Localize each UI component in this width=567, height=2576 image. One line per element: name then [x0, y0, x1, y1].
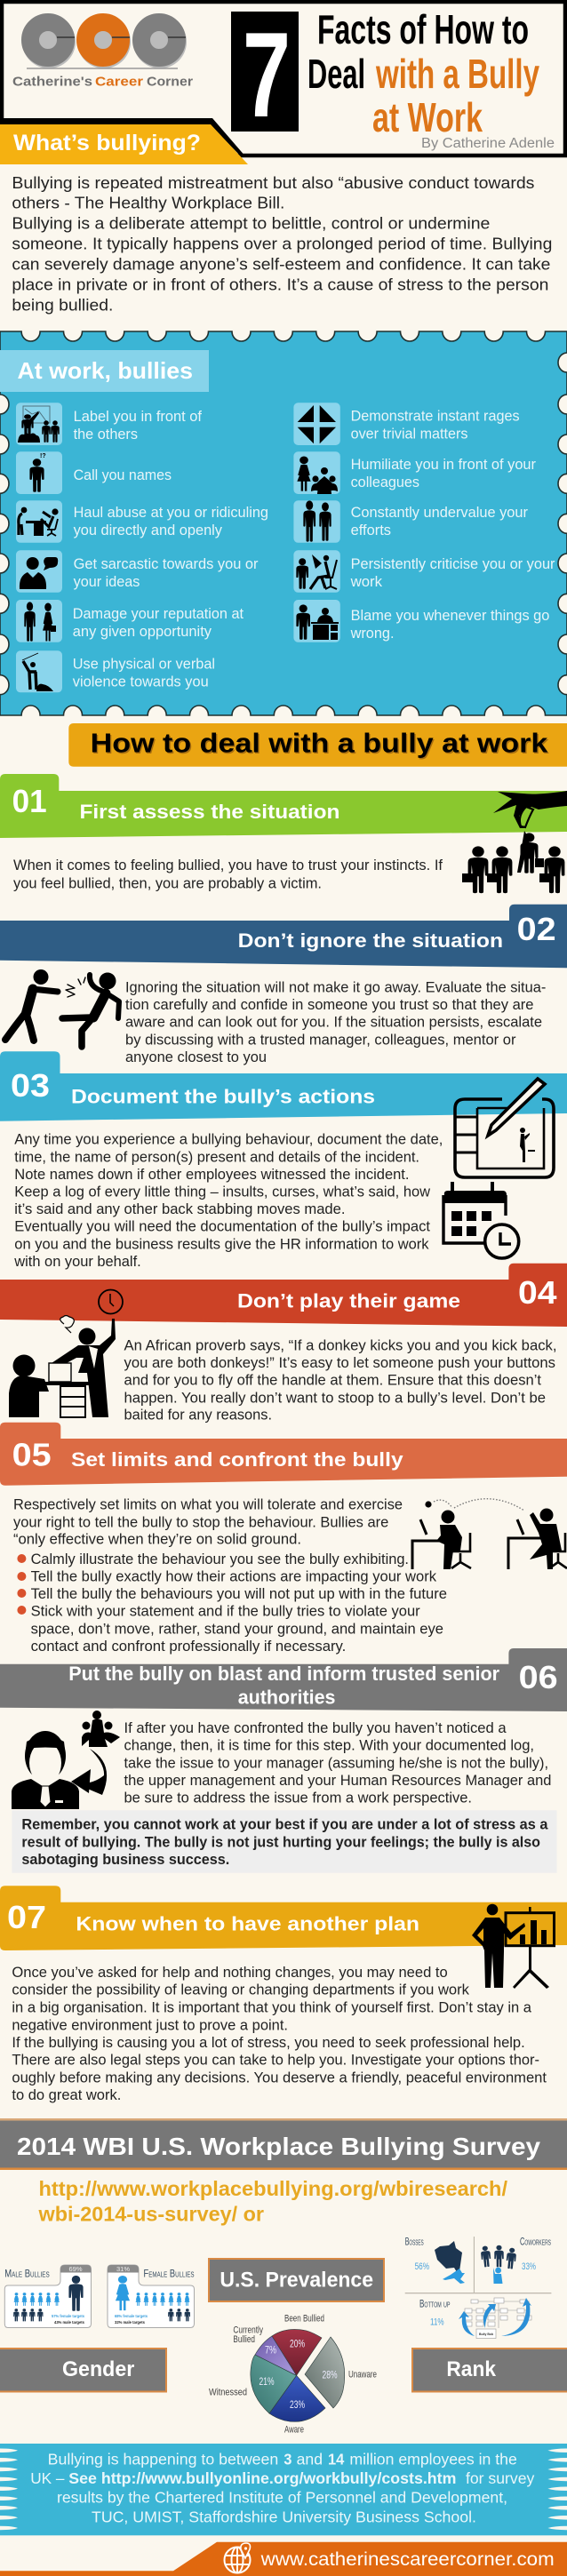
- list: right column behaviours: Persistently criticise you or your: [351, 556, 555, 572]
- body 03: Eventually you will need the documentation of the bully’s impact: [14, 1219, 430, 1235]
- slice values: 20%: [290, 2340, 305, 2350]
- step 07: Know when to have another plan: [0, 1886, 567, 2103]
- card: female bullies: 68% female targets: [115, 2314, 148, 2318]
- body 05: Respectively set limits on what you will tolerate and exercise: [13, 1496, 403, 1512]
- list: right column behaviours: efforts: [351, 522, 391, 538]
- survey heading band: [0, 2118, 567, 2170]
- body 01: you feel bullied, then, you are probably a victim.: [13, 875, 322, 891]
- card: female bullies: 32% male targets: [115, 2320, 146, 2325]
- panel heading: At work, bullies: [0, 350, 209, 392]
- card: female bullies: Female Bullies: [144, 2268, 194, 2280]
- logo: Catherine's Career Corner: [12, 15, 193, 89]
- number 01: 01: [12, 783, 47, 819]
- band 01: [0, 774, 567, 838]
- body 03: Note names down if other employees witnessed the incident.: [14, 1167, 409, 1183]
- body 03: Any time you experience a bullying behaviour, document the date,: [14, 1132, 443, 1148]
- statistics text: See http://www.bullyonline.org/workbully/costs.htm: [68, 2469, 456, 2487]
- label: Gender: [0, 2349, 166, 2392]
- body 06: the upper management and your Human Resources Manager and: [124, 1773, 551, 1789]
- body 07: in a big organisation. It is important that you think of yourself first. Don’t stay in a: [12, 2000, 532, 2016]
- body 04: and for you to fly off the handle at them. Ensure that this doesn’t: [124, 1373, 541, 1389]
- body 01: When it comes to feeling bullied, you have to trust your instincts. If: [13, 857, 443, 873]
- icon: man with question marks: !?: [40, 453, 46, 459]
- list: right column behaviours: [350, 408, 555, 642]
- rank: bosses: [405, 2236, 465, 2284]
- icon: woman and group: [297, 456, 338, 494]
- body 07: to do great work.: [12, 2087, 121, 2103]
- heading 03: Document the bully’s actions: [71, 1086, 375, 1108]
- body 06: [124, 1720, 551, 1806]
- body 07: If the bullying is causing you a lot of stress, you need to seek professional help.: [12, 2035, 525, 2051]
- body 07: Once you’ve asked for help and nothing changes, you may need to: [12, 1965, 448, 1981]
- logo: Catherine's Career Corner: Catherine's: [12, 75, 92, 89]
- slice values: 21%: [260, 2377, 274, 2388]
- list: right column behaviours: Humiliate you in front of your: [351, 457, 537, 473]
- icon tiles: [16, 403, 340, 692]
- heading: How to deal with a bully at work: How to deal with a bully at work: [91, 729, 547, 759]
- panel heading: At work, bullies: At work, bullies: [18, 357, 193, 384]
- decorative notches: [0, 2449, 567, 2530]
- title: [307, 6, 539, 140]
- list: right column behaviours: wrong.: [350, 626, 395, 642]
- statistics text: 14: [328, 2450, 345, 2468]
- card: female bullies: 31%: [116, 2265, 130, 2273]
- callout: remember: Remember, you cannot work at your best if you are under a lot of stress as a: [21, 1816, 548, 1832]
- logo: Catherine's Career Corner: Corner: [147, 75, 193, 89]
- body 02: Ignoring the situation will not make it go away. Evaluate the situa-: [125, 980, 546, 996]
- body 03: [13, 1132, 443, 1270]
- header panel: [2, 2, 565, 156]
- bullet list: Stick with your statement and if the bully tries to violate your: [31, 1604, 420, 1620]
- body 06: be sure to address the issue from a work perspective.: [124, 1790, 472, 1806]
- body 07: consider the possibility of leaving or changing departments if you work: [12, 1982, 470, 1998]
- icon: boss with feet on desk: [19, 507, 59, 536]
- rank: bosses: Bosses: [405, 2236, 424, 2248]
- gender chart: [4, 2265, 194, 2328]
- bullet list: space, don’t move, rather, stand your ground, and maintain eye: [31, 1621, 443, 1637]
- slice labels: Been Bullied: [284, 2314, 324, 2325]
- body 07: There are also legal steps you can take to help you. Investigate your options thor-: [12, 2053, 539, 2069]
- step 02: Don't ignore the situation: [0, 905, 567, 1065]
- step 05: Set limits and confront the bully: [0, 1423, 567, 1655]
- slices: [251, 2329, 345, 2421]
- list: left column behaviours: Damage your reputation at: [73, 606, 244, 622]
- list: left column behaviours: any given opportunity: [73, 624, 212, 640]
- statistics text: results by the Chartered Institute of Personnel and Development,: [57, 2489, 507, 2507]
- bullet list: Calmly illustrate the behaviour you see the bully exhibiting.: [31, 1551, 409, 1567]
- title: at Work: [372, 94, 483, 140]
- heading 02: Don’t ignore the situation: [238, 929, 503, 952]
- statistics text: [30, 2450, 535, 2525]
- list: right column behaviours: colleagues: [351, 475, 419, 490]
- title: Deal: [307, 51, 365, 97]
- list: right column behaviours: Demonstrate instant rages: [351, 408, 520, 424]
- rank chart: [405, 2236, 551, 2339]
- heading 06: authorities: [238, 1686, 336, 1708]
- icon: manager bust, group and arrow: [12, 1711, 120, 1809]
- body 04: [124, 1337, 556, 1423]
- survey link: wbi-2014-us-survey/ or: [38, 2202, 264, 2225]
- card: male bullies: [4, 2265, 91, 2328]
- text block: definition of bullying: can severely damage anyone’s self-esteem and confidence. It can take: [12, 256, 550, 274]
- body 03: time, the name of person(s) present and details of the incident.: [14, 1149, 419, 1165]
- slice labels: Currently: [233, 2325, 263, 2336]
- list: left column behaviours: you directly and openly: [74, 522, 223, 538]
- bullet list: [17, 1551, 447, 1655]
- slice values: 23%: [290, 2400, 305, 2411]
- statistics text: 3: [284, 2450, 292, 2468]
- body 07: negative environment just to prove a point.: [12, 2017, 288, 2033]
- card: male bullies: 43% male targets: [54, 2320, 85, 2325]
- step 04: Don't play their game: [0, 1264, 567, 1423]
- rank: coworkers: 33%: [522, 2261, 536, 2272]
- panel: at work, bullies (stamp): [0, 331, 567, 715]
- body 03: with on your behalf.: [13, 1254, 141, 1270]
- body 07: [12, 1965, 547, 2103]
- card: male bullies: 57% female targets: [52, 2314, 85, 2318]
- slice labels: [209, 2314, 377, 2435]
- icon: man with question marks: [29, 453, 46, 492]
- slice values: [260, 2340, 338, 2411]
- slice labels: Witnessed: [209, 2388, 247, 2398]
- text block: definition of bullying: being bullied.: [12, 296, 113, 314]
- banner: What's bullying?: What’s bullying?: [13, 132, 201, 156]
- callout: remember: sabotaging business success.: [21, 1852, 229, 1868]
- number 04: 04: [518, 1274, 556, 1311]
- list: right column behaviours: over trivial matters: [351, 426, 467, 442]
- callout: remember: [12, 1810, 556, 1873]
- heading: How to deal with a bully at work: How to deal with a bully at work: [92, 730, 549, 760]
- band 07: [0, 1886, 567, 1950]
- statistics text: Bullying is happening to between: [48, 2450, 278, 2468]
- statistics text: and: [297, 2450, 323, 2468]
- text block: definition of bullying: Bullying is repeated mistreatment but also “abusive conduct towards: [12, 174, 534, 192]
- text block: definition of bullying: place in private or in front of others. It’s a cause of stress to the person: [12, 276, 548, 294]
- number 03: 03: [11, 1067, 50, 1104]
- icon: man and seated woman reading: [296, 554, 337, 589]
- rank: bottom up: Bottom up: [419, 2298, 450, 2310]
- list: right column behaviours: work: [350, 574, 383, 590]
- card: male bullies: Male Bullies: [4, 2268, 50, 2280]
- rank: coworkers: [480, 2236, 551, 2284]
- survey link: http://www.workplacebullying.org/wbiresearch/: [39, 2177, 507, 2200]
- footer: [0, 2542, 567, 2576]
- rank: bottom up: [419, 2298, 531, 2339]
- list: left column behaviours: violence towards you: [73, 674, 209, 690]
- icon: angry man at desk with clock: [9, 1290, 123, 1417]
- rank: bottom up: Bully Bob: [479, 2332, 493, 2336]
- body 02: anyone closest to you: [125, 1049, 267, 1065]
- list: left column behaviours: the others: [74, 427, 138, 443]
- list: left column behaviours: Haul abuse at you or ridiculing: [74, 505, 268, 521]
- number 07: 07: [7, 1899, 46, 1935]
- bullet list: Tell the bully exactly how their actions are impacting your work: [31, 1568, 437, 1584]
- body 06: take the issue to your manager (assuming he/she is not the bully),: [124, 1755, 548, 1771]
- survey link: [38, 2177, 507, 2225]
- band 03: [0, 1051, 567, 1121]
- label: Rank: Rank: [446, 2357, 497, 2381]
- text block: definition of bullying: Bullying is a deliberate attempt to belittle, control or undermine: [12, 215, 490, 233]
- body 04: you are both donkeys!” It’s easy to let someone push your buttons: [124, 1355, 555, 1371]
- list: left column behaviours: Use physical or verbal: [73, 657, 215, 673]
- bullet list: Tell the bully the behaviours you will not put up with in the future: [31, 1586, 447, 1602]
- body 05: your right to tell the bully to stop the behaviour. Bullies are: [13, 1514, 388, 1530]
- body 06: change, then, it is time for this step. With your documented log,: [124, 1738, 534, 1754]
- band 02: [0, 905, 567, 968]
- slice values: 28%: [322, 2371, 338, 2381]
- slice labels: Aware: [284, 2424, 304, 2435]
- byline: By Catherine Adenle: [421, 136, 555, 151]
- icon: speaker bust with speech bubble: [20, 557, 58, 589]
- body 03: it’s said and any other back stabbing moves made.: [14, 1201, 346, 1217]
- icon: figure striking a kneeling person: [22, 653, 53, 691]
- card: male bullies: 69%: [68, 2265, 83, 2273]
- number 02: 02: [517, 911, 556, 947]
- body 02: aware and can look out for you. If the situation persists, escalate: [125, 1015, 542, 1031]
- body 04: An African proverb says, “If a donkey kicks you and you kick back,: [124, 1337, 556, 1353]
- icon: calendar with clock: [443, 1182, 519, 1258]
- list: right column behaviours: Blame you whenever things go: [351, 608, 549, 624]
- label: U.S. Prevalence: [209, 2259, 384, 2301]
- banner: What's bullying?: [0, 118, 248, 164]
- statistics text: TUC, UMIST, Staffordshire University Business School.: [92, 2508, 476, 2525]
- body 02: [125, 980, 546, 1065]
- band 04: [0, 1264, 567, 1327]
- statistics text: million employees in the: [349, 2450, 517, 2468]
- list: left column behaviours: Get sarcastic towards you or: [74, 556, 259, 572]
- statistics text: for survey: [466, 2469, 535, 2487]
- big number 7: 7: [243, 7, 291, 142]
- label: U.S. Prevalence: U.S. Prevalence: [220, 2268, 373, 2292]
- heading 06: Put the bully on blast and inform trusted senior: [68, 1663, 499, 1685]
- icon: two businessmen: [303, 500, 331, 542]
- text block: definition of bullying: others - The Healthy Workplace Bill.: [12, 195, 284, 212]
- body 01: [13, 857, 443, 891]
- icon: presenter with bar chart board: [472, 1904, 555, 1989]
- list: left column behaviours: your ideas: [74, 574, 140, 590]
- statistics text: UK –: [30, 2469, 65, 2487]
- list: left column behaviours: [73, 409, 268, 690]
- icon: globe with pin: [224, 2543, 251, 2573]
- step 01: First assess the situation: [0, 774, 567, 893]
- body 02: tion carefully and confide in someone you trust so that they are: [125, 997, 533, 1013]
- body 05: “only effective when they’re on solid ground.: [13, 1532, 301, 1548]
- icon: man at desk: [296, 604, 339, 640]
- rank: bottom up: 11%: [430, 2317, 444, 2328]
- logo: Catherine's Career Corner: Career: [95, 75, 143, 89]
- list: right column behaviours: Constantly undervalue your: [351, 505, 529, 521]
- pie chart: U.S. prevalence: [209, 2314, 377, 2435]
- body 05: [13, 1496, 403, 1548]
- slice labels: Bullied: [233, 2334, 255, 2345]
- label: Rank: [412, 2349, 567, 2392]
- icon: man and woman talking: [24, 602, 56, 642]
- body 03: Keep a log of every little thing – insults, curses, what’s said, how: [14, 1184, 430, 1200]
- icon: giant hand lifting a worker: [462, 791, 567, 893]
- number 05: 05: [12, 1436, 52, 1472]
- number 06: 06: [519, 1659, 558, 1695]
- icon: tablet with pencil: [455, 1079, 554, 1177]
- list: left column behaviours: Label you in front of: [74, 409, 203, 425]
- body 04: baited for any reasons.: [124, 1407, 272, 1423]
- survey heading band: 2014 WBI U.S. Workplace Bullying Survey: [17, 2133, 540, 2160]
- band 06: [0, 1648, 567, 1711]
- list: left column behaviours: Call you names: [74, 467, 172, 483]
- body 04: happen. You really don’t want to stoop to a bully’s level. Don’t be: [124, 1390, 546, 1406]
- body 02: by discussing with a trusted manager, colleagues, mentor or: [125, 1032, 516, 1048]
- step 03: Document the bully's actions: [0, 1051, 567, 1270]
- heading 06: [68, 1663, 499, 1708]
- heading 05: Set limits and confront the bully: [71, 1448, 403, 1471]
- heading: How to deal with a bully at work: [68, 723, 567, 767]
- icon: two colleagues at desks with dotted arc: [412, 1499, 567, 1569]
- icon: presenter and audience: [18, 406, 60, 443]
- slice labels: Unaware: [348, 2370, 377, 2381]
- heading 04: Don’t play their game: [237, 1290, 460, 1312]
- heading 07: Know when to have another plan: [76, 1912, 419, 1934]
- body 07: oughly before making any decisions. You deserve a friendly, peaceful environment: [12, 2070, 547, 2086]
- bullet list: contact and confront professionally if necessary.: [31, 1639, 346, 1655]
- callout: UK statistics panel: [0, 2444, 567, 2535]
- heading 01: First assess the situation: [80, 801, 339, 823]
- step 06: Put the bully on blast: [0, 1648, 567, 1873]
- label: Gender: Gender: [62, 2357, 134, 2381]
- text block: definition of bullying: someone. It typically happens over a prolonged period of time. Bullying: [12, 235, 552, 253]
- slice values: 7%: [265, 2346, 276, 2357]
- website address: www.catherinescareercorner.com: [260, 2548, 555, 2570]
- icon: figure pushing another: [5, 969, 119, 1047]
- rank: bosses: 56%: [415, 2261, 429, 2272]
- text block: definition of bullying: [12, 174, 552, 314]
- callout: remember: result of bullying. The bully is not just hurting your feelings; the bully is also: [21, 1834, 540, 1850]
- icon: four triangles: [298, 405, 336, 443]
- card: female bullies: [108, 2265, 194, 2328]
- body 03: on you and the business results give the HR information to work: [14, 1236, 429, 1252]
- body 06: If after you have confronted the bully you haven’t noticed a: [124, 1720, 507, 1736]
- band 05: [0, 1423, 567, 1486]
